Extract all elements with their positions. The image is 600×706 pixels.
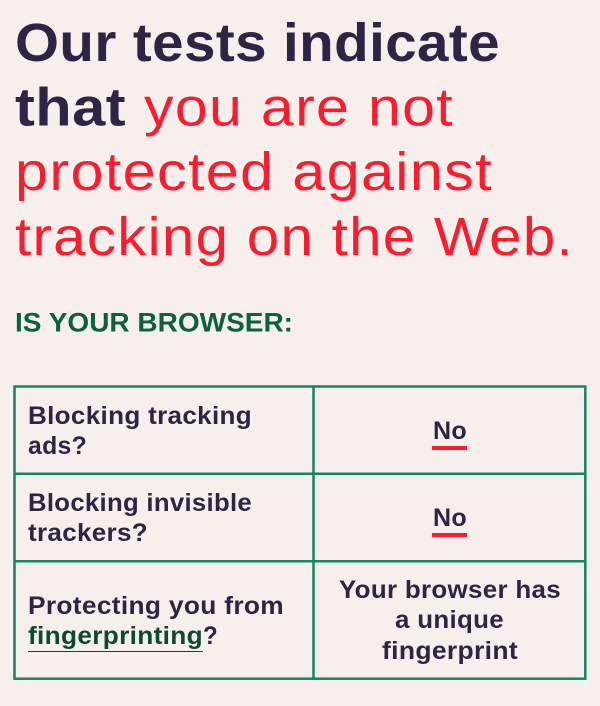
title: Our tests indicate	[15, 13, 500, 73]
row 3 answer: fingerprint	[382, 637, 518, 665]
row 2 question: trackers?	[28, 519, 148, 547]
row 1 answer: No	[433, 417, 467, 445]
row 3 question: ?	[203, 622, 218, 650]
row 2 question: Blocking invisible	[28, 489, 252, 517]
row 1 question: ads?	[28, 432, 87, 460]
title: you are not	[144, 78, 454, 138]
row 1 question: Blocking tracking	[28, 402, 252, 430]
row 1 question	[28, 402, 252, 460]
table grid	[14, 386, 585, 679]
row 3 answer	[339, 576, 561, 665]
row 2 question	[28, 489, 252, 547]
results table	[14, 386, 585, 679]
row 3 answer: a unique	[395, 606, 504, 634]
row 3 question: fingerprinting	[28, 622, 203, 650]
row 2 answer: No	[433, 504, 467, 532]
title	[15, 13, 574, 267]
subheading: IS YOUR BROWSER:	[15, 308, 293, 338]
title: that	[15, 78, 126, 138]
title: protected against	[15, 142, 493, 202]
row 3 question: Protecting you from	[28, 592, 284, 620]
title: tracking on the Web.	[15, 207, 574, 267]
row 3 question	[28, 592, 284, 652]
row 3 answer: Your browser has	[339, 576, 561, 604]
